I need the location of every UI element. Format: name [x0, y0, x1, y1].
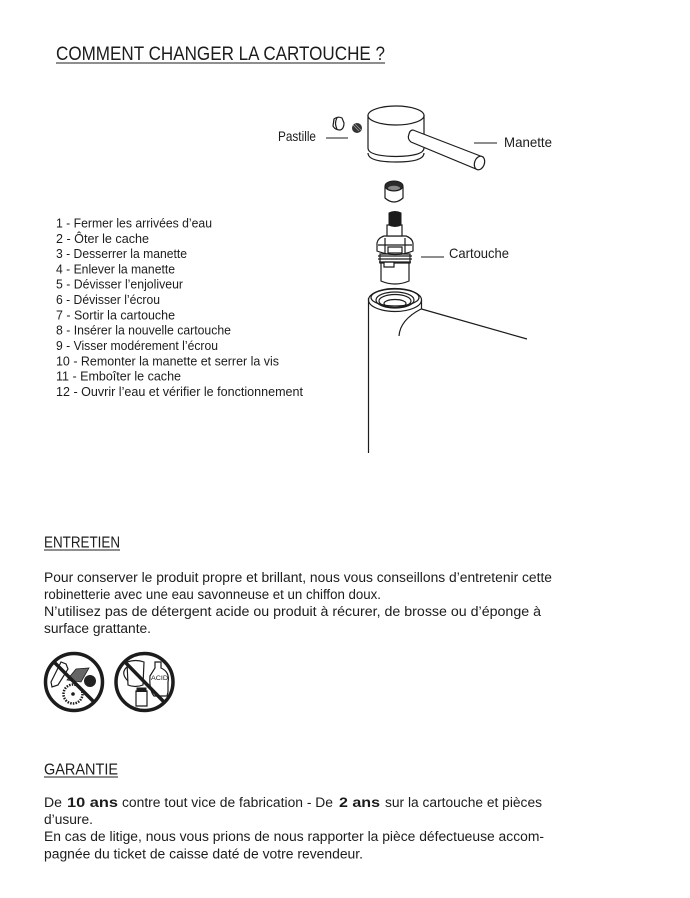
numbered steps: 11 - Emboîter le cache	[56, 370, 181, 384]
exploded faucet diagram	[333, 106, 527, 453]
icon: nut	[385, 181, 403, 202]
text: warranty: d’usure.	[44, 812, 93, 828]
text: warranty: contre tout vice de fabrication - De	[122, 795, 333, 811]
numbered steps: 2 - Ôter le cache	[56, 231, 149, 246]
numbered steps: 8 - Insérer la nouvelle cartouche	[56, 324, 231, 338]
text: warranty: 2 ans	[339, 795, 380, 811]
heading: Garantie: GARANTIE	[44, 762, 118, 778]
icon: no chemical products: ACID	[151, 676, 169, 682]
text: care instructions: Pour conserver le produit propre et brillant, nous vous conseillons d’entretenir cette	[44, 570, 552, 586]
numbered steps: 6 - Dévisser l’écrou	[56, 293, 160, 307]
title: COMMENT CHANGER LA CARTOUCHE ?	[56, 44, 385, 65]
text: warranty	[44, 795, 544, 862]
label: Manette	[474, 134, 552, 150]
label: Cartouche: Cartouche	[449, 245, 509, 261]
icon: set screw	[352, 123, 362, 133]
label: Cartouche	[421, 245, 509, 261]
numbered steps	[56, 216, 304, 399]
text: care instructions: N’utilisez pas de détergent acide ou produit à récurer, de brosse ou d’éponge à	[44, 604, 541, 620]
icon: cartridge	[377, 212, 413, 284]
icon: no abrasive tools	[46, 654, 102, 710]
text: care instructions: surface grattante.	[44, 621, 151, 637]
text: warranty: En cas de litige, nous vous prions de nous rapporter la pièce défectueuse accom-	[44, 829, 544, 845]
numbered steps: 12 - Ouvrir l’eau et vérifier le fonctionnement	[56, 385, 304, 399]
numbered steps: 1 - Fermer les arrivées d’eau	[56, 216, 212, 230]
heading: Entretien: ENTRETIEN	[44, 534, 120, 552]
text: warranty: sur la cartouche et pièces	[385, 795, 542, 811]
text: care instructions	[44, 570, 552, 637]
numbered steps: 10 - Remonter la manette et serrer la vis	[56, 354, 279, 368]
numbered steps: 9 - Visser modérement l’écrou	[56, 339, 218, 353]
label: Manette: Manette	[504, 134, 552, 150]
icon: handle	[368, 106, 486, 171]
numbered steps: 4 - Enlever la manette	[56, 262, 175, 276]
label: Pastille: Pastille	[278, 128, 316, 144]
text: warranty: pagnée du ticket de caisse daté de votre revendeur.	[44, 846, 363, 862]
text: warranty: 10 ans	[67, 795, 118, 811]
label: Pastille	[278, 128, 348, 144]
icon: no chemical products	[116, 654, 173, 710]
numbered steps: 5 - Dévisser l’enjoliveur	[56, 278, 183, 292]
text: warranty: De	[44, 795, 62, 811]
numbered steps: 7 - Sortir la cartouche	[56, 308, 175, 322]
icon: pastille cap	[333, 117, 344, 130]
faucet body	[368, 288, 527, 453]
numbered steps: 3 - Desserrer la manette	[56, 247, 187, 261]
text: care instructions: robinetterie avec une eau savonneuse et un chiffon doux.	[44, 587, 381, 603]
